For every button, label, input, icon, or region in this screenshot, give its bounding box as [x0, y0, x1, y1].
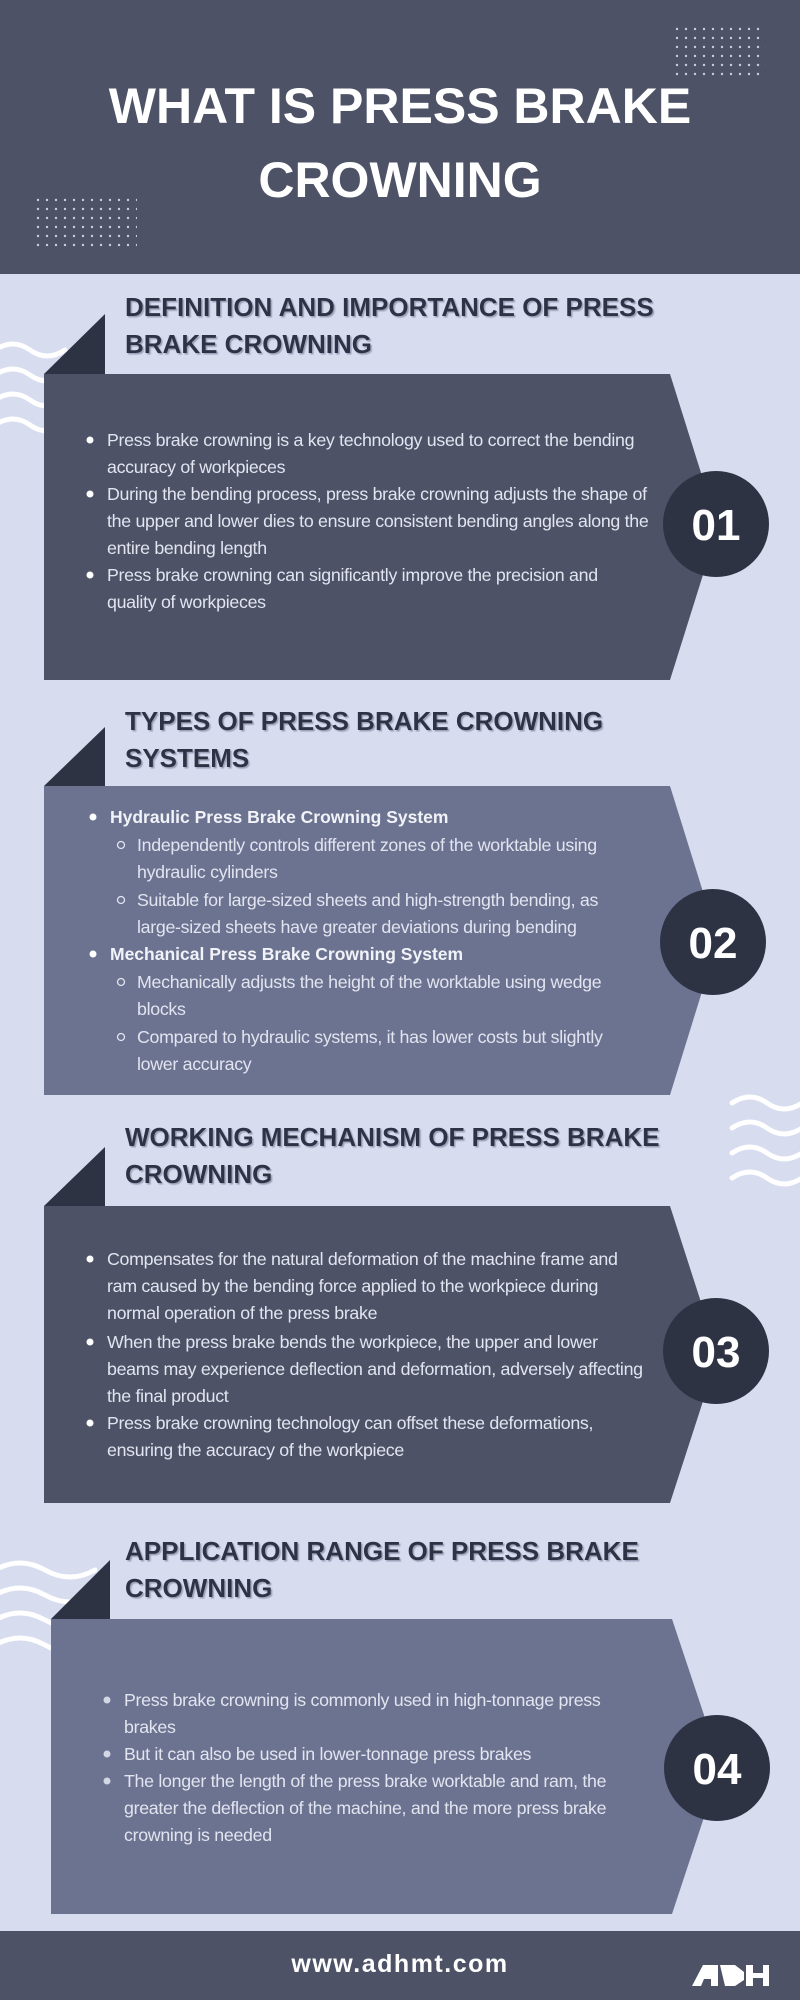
text 4: crowning is needed	[124, 1825, 272, 1845]
title: WHAT IS PRESS BRAKE	[109, 78, 691, 134]
heading 4: CROWNING	[125, 1573, 272, 1603]
text 3: ram caused by the bending force applied to the workpiece during	[107, 1276, 598, 1296]
panel 2	[44, 786, 718, 1095]
waves left bottom	[0, 1563, 95, 1652]
text 4: The longer the length of the press brake worktable and ram, the	[124, 1771, 607, 1791]
number 03: 03	[692, 1328, 740, 1377]
text 2: blocks	[137, 999, 186, 1019]
panel 3	[44, 1206, 718, 1503]
text 1: entire bending length	[107, 538, 267, 558]
text 2: hydraulic cylinders	[137, 862, 278, 882]
text 4: Press brake crowning is commonly used in high-tonnage press	[124, 1690, 601, 1710]
number 02	[660, 889, 766, 995]
text 3: normal operation of the press brake	[107, 1303, 378, 1323]
waves right	[732, 1097, 800, 1184]
number 01	[663, 471, 769, 577]
text 1: During the bending process, press brake crowning adjusts the shape of	[107, 484, 647, 504]
section 3	[44, 1122, 769, 1503]
text 3: When the press brake bends the workpiece, the upper and lower	[107, 1332, 598, 1352]
text 1: Press brake crowning can significantly improve the precision and	[107, 565, 598, 585]
heading 4: APPLICATION RANGE OF PRESS BRAKE	[125, 1536, 639, 1566]
number 03	[663, 1298, 769, 1404]
text 2: Suitable for large-sized sheets and high-strength bending, as	[137, 890, 599, 910]
text 2: large-sized sheets have greater deviations during bending	[137, 917, 577, 937]
text 1	[86, 430, 649, 612]
text 2: lower accuracy	[137, 1054, 252, 1074]
number 01: 01	[692, 501, 740, 550]
decorative waves left top	[0, 344, 65, 431]
section 1	[44, 292, 769, 680]
text 3	[86, 1249, 643, 1460]
heading 2	[125, 706, 603, 773]
text 4: brakes	[124, 1717, 176, 1737]
text 1: the upper and lower dies to ensure consistent bending angles along the	[107, 511, 649, 531]
heading 2: TYPES OF PRESS BRAKE CROWNING	[125, 706, 603, 736]
footer url: www.adhmt.com	[290, 1950, 509, 1978]
panel 1	[44, 374, 718, 680]
panel 4	[51, 1619, 721, 1914]
text 2: Compared to hydraulic systems, it has lower costs but slightly	[137, 1027, 603, 1047]
title: CROWNING	[258, 152, 542, 208]
header	[0, 0, 800, 274]
text 4	[104, 1690, 607, 1845]
heading 1	[125, 292, 654, 359]
text 1: quality of workpieces	[107, 592, 266, 612]
text 1: accuracy of workpieces	[107, 457, 286, 477]
text 3: Compensates for the natural deformation of the machine frame and	[107, 1249, 618, 1269]
text 3: Press brake crowning technology can offset these deformations,	[107, 1413, 593, 1433]
heading 3	[125, 1122, 659, 1189]
number 02: 02	[689, 919, 737, 968]
text 2: Mechanical Press Brake Crowning System	[110, 944, 463, 964]
text 4: greater the deflection of the machine, and the more press brake	[124, 1798, 607, 1818]
number 04: 04	[693, 1745, 742, 1794]
text 1: Press brake crowning is a key technology used to correct the bending	[107, 430, 634, 450]
section 2	[44, 706, 766, 1095]
heading 4	[125, 1536, 639, 1603]
heading 2: SYSTEMS	[125, 743, 249, 773]
number 04	[664, 1715, 770, 1821]
text 4: But it can also be used in lower-tonnage press brakes	[124, 1744, 532, 1764]
heading 3: WORKING MECHANISM OF PRESS BRAKE	[125, 1122, 659, 1152]
heading 1: BRAKE CROWNING	[125, 329, 372, 359]
logo ADH	[692, 1965, 769, 1986]
text 2	[90, 807, 603, 1074]
text 3: the final product	[107, 1386, 229, 1406]
text 2: Hydraulic Press Brake Crowning System	[110, 807, 448, 827]
section 4	[51, 1536, 770, 1914]
heading 3: CROWNING	[125, 1159, 272, 1189]
footer	[0, 1931, 800, 2000]
text 3: ensuring the accuracy of the workpiece	[107, 1440, 404, 1460]
text 2: Independently controls different zones of the worktable using	[137, 835, 597, 855]
title	[109, 78, 691, 208]
heading 1: DEFINITION AND IMPORTANCE OF PRESS	[125, 292, 654, 322]
text 2: Mechanically adjusts the height of the worktable using wedge	[137, 972, 602, 992]
text 3: beams may experience deflection and deformation, adversely affecting	[107, 1359, 643, 1379]
